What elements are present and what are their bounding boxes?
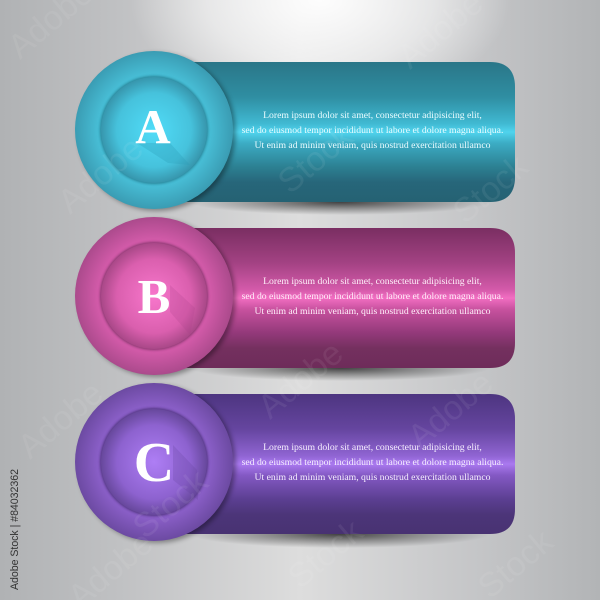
letter shadow C [173,445,198,500]
body text C: Ut enim ad minim veniam, quis nostrud exercitation ullamco [255,472,491,483]
panel: A [75,51,515,215]
panel: C [75,383,515,548]
circle C [75,383,236,543]
letter shadow B [170,285,195,335]
letter A: A [135,99,171,154]
bar A [154,62,515,202]
bar shadow C [190,520,490,548]
body text C: Lorem ipsum dolor sit amet, consectetur adipisicing elit, [263,442,482,453]
body text B: Lorem ipsum dolor sit amet, consectetur adipisicing elit, [263,276,482,287]
letter C: C [134,432,174,494]
circle A [75,51,236,211]
body text C: sed do eiusmod tempor incididunt ut labore et dolore magna aliqua. [242,457,503,468]
body text A: Lorem ipsum dolor sit amet, consectetur adipisicing elit, [263,110,482,121]
bar shadow B [190,355,490,381]
letter B: B [138,269,170,324]
watermark text: Stock [126,462,216,546]
circle B [75,217,236,377]
stock id label: Adobe Stock | #84032362 [9,469,21,590]
panel: B [75,217,515,381]
watermark text: Adobe [251,334,350,426]
watermark text: Stock [446,147,536,231]
watermark text: Adobe [51,129,150,221]
body text A: sed do eiusmod tempor incididunt ut labore et dolore magna aliqua. [242,125,503,136]
bar C [154,394,515,534]
watermark text: Stock [281,512,371,596]
body text A: Ut enim ad minim veniam, quis nostrud exercitation ullamco [255,140,491,151]
watermark text: Adobe [401,364,500,456]
body text B: sed do eiusmod tempor incididunt ut labore et dolore magna aliqua. [242,291,503,302]
bar B [154,228,515,368]
letter shadow A [137,143,190,165]
watermark text: Adobe [11,374,110,466]
body text B: Ut enim ad minim veniam, quis nostrud exercitation ullamco [255,306,491,317]
watermark text: Stock [271,117,361,201]
bar shadow A [190,189,490,215]
